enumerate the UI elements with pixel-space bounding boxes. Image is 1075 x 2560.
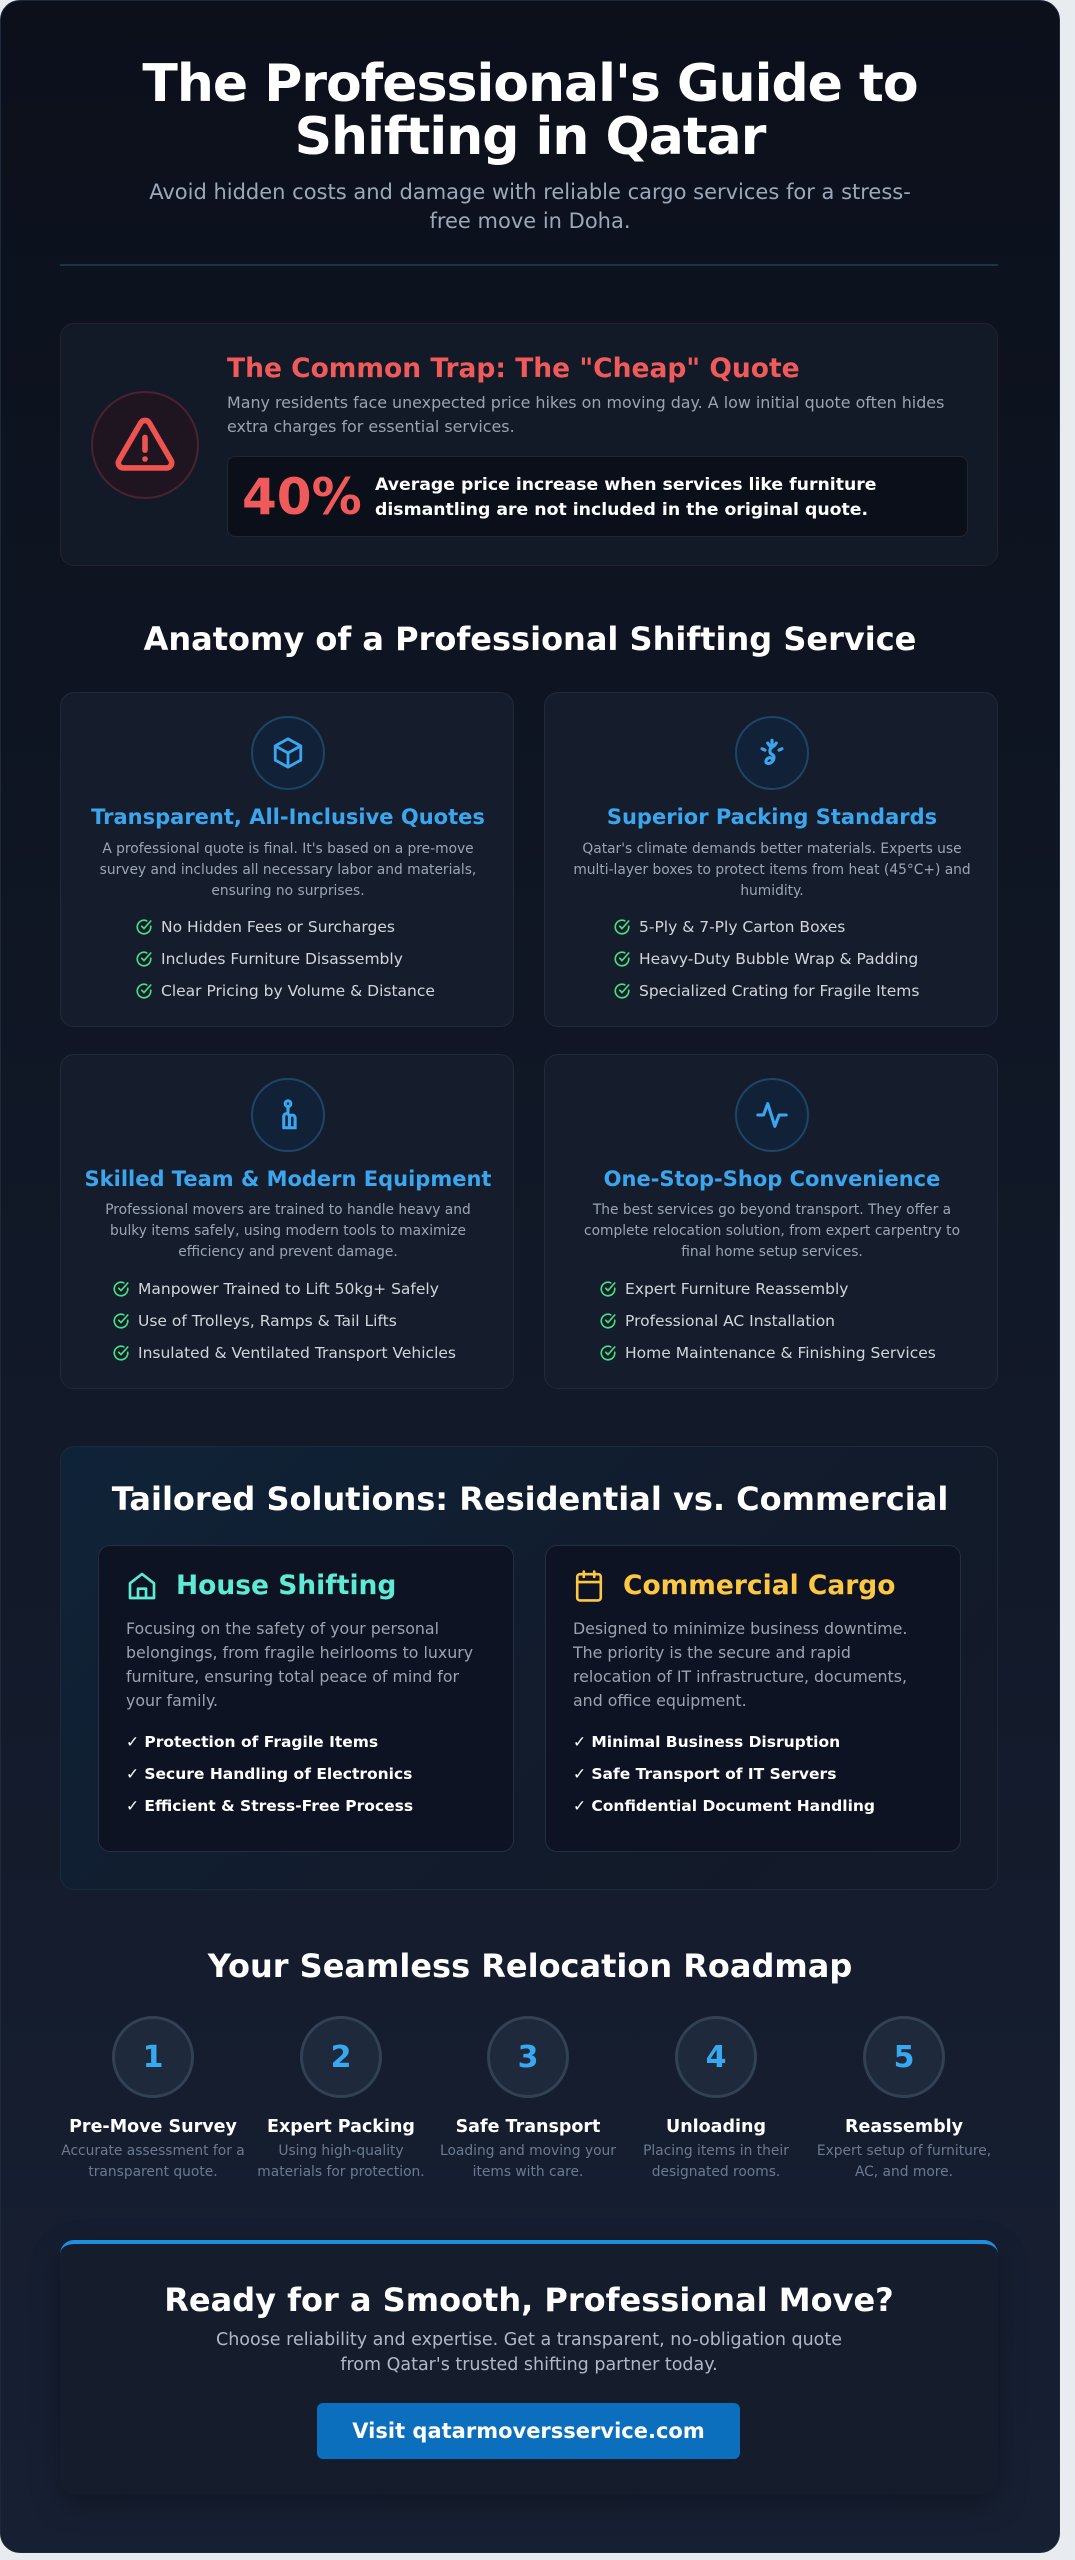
- step 1: [61, 2016, 245, 2180]
- icon: calendar: [576, 1570, 602, 1602]
- step 5: Expert setup of furniture,: [817, 2143, 991, 2159]
- card text: [573, 841, 971, 899]
- checklist: [113, 1280, 456, 1362]
- card text: [100, 841, 476, 899]
- box: house shifting: [98, 1545, 514, 1852]
- checklist: Heavy-Duty Bubble Wrap & Padding: [639, 950, 918, 968]
- card text: The best services go beyond transport. They offer a: [593, 1202, 951, 1218]
- box text: and office equipment.: [573, 1691, 747, 1710]
- checklist: Use of Trolleys, Ramps & Tail Lifts: [138, 1312, 397, 1330]
- subtitle: free move in Doha.: [429, 209, 631, 233]
- box text: furniture, ensuring total peace of mind for: [126, 1667, 459, 1686]
- box text: your family.: [126, 1691, 218, 1710]
- checklist: Clear Pricing by Volume & Distance: [161, 982, 435, 1000]
- icon: packing: [735, 716, 809, 790]
- checklist: Expert Furniture Reassembly: [625, 1280, 848, 1298]
- step 1: 1: [143, 2040, 163, 2074]
- icon: house: [128, 1572, 156, 1600]
- card text: Professional movers are trained to handle heavy and: [105, 1202, 471, 1218]
- step 2: [257, 2016, 425, 2180]
- button: [317, 2403, 740, 2459]
- trap text: extra charges for essential services.: [227, 417, 515, 436]
- subtitle: [149, 180, 911, 233]
- step 3: Safe Transport: [456, 2117, 600, 2137]
- panel: skilled team: [60, 1054, 514, 1389]
- stat text: dismantling are not included in the original quote.: [375, 500, 868, 520]
- checklist: Specialized Crating for Fragile Items: [639, 982, 919, 1000]
- bullets: [126, 1733, 413, 1815]
- step 3: items with care.: [473, 2164, 583, 2180]
- step 2: materials for protection.: [257, 2164, 425, 2180]
- title: [142, 54, 918, 167]
- stat text: Average price increase when services like furniture: [375, 475, 877, 495]
- box text: Designed to minimize business downtime.: [573, 1619, 907, 1638]
- stat: 40%: 40%: [242, 468, 362, 526]
- button: Visit qatarmoversservice.com: [352, 2419, 705, 2443]
- bullets: ✓ Minimal Business Disruption: [573, 1733, 840, 1751]
- card text: final home setup services.: [681, 1244, 863, 1260]
- stat text: [375, 475, 877, 520]
- icon: box: [251, 716, 325, 790]
- cta text: Choose reliability and expertise. Get a transparent, no-obligation quote: [216, 2330, 842, 2350]
- card text: A professional quote is final. It's based on a pre-move: [102, 841, 474, 857]
- title: Shifting in Qatar: [295, 107, 765, 167]
- step 4: [643, 2016, 789, 2180]
- card text: Qatar's climate demands better materials. Experts use: [582, 841, 962, 857]
- bullets: [573, 1733, 875, 1815]
- step 1: Accurate assessment for a: [61, 2143, 245, 2159]
- box title: House Shifting: [176, 1570, 396, 1601]
- card title: One-Stop-Shop Convenience: [604, 1167, 940, 1191]
- card text: efficiency and prevent damage.: [178, 1244, 398, 1260]
- icon: pulse: [735, 1078, 809, 1152]
- subtitle: Avoid hidden costs and damage with reliable cargo services for a stress-: [149, 180, 911, 204]
- step 4: 4: [706, 2040, 726, 2074]
- step 4: Unloading: [666, 2117, 766, 2137]
- heading: anatomy: Anatomy of a Professional Shifting Service: [144, 620, 916, 658]
- checklist: [600, 1280, 936, 1362]
- icon: worker: [251, 1078, 325, 1152]
- step 3: Loading and moving your: [440, 2143, 616, 2159]
- checklist: No Hidden Fees or Surcharges: [161, 918, 395, 936]
- step 5: [817, 2016, 991, 2180]
- icon: warning: [91, 391, 199, 499]
- box: commercial cargo: [545, 1545, 961, 1852]
- step 3: 3: [518, 2040, 538, 2074]
- card text: [584, 1202, 960, 1260]
- box text: Focusing on the safety of your personal: [126, 1619, 439, 1638]
- card text: humidity.: [740, 883, 804, 899]
- bullets: ✓ Confidential Document Handling: [573, 1797, 875, 1815]
- checklist: Professional AC Installation: [625, 1312, 835, 1330]
- checklist: 5-Ply & 7-Ply Carton Boxes: [639, 918, 845, 936]
- box text: relocation of IT infrastructure, documents,: [573, 1667, 907, 1686]
- title: The Professional's Guide to: [142, 54, 918, 114]
- step 1: Pre-Move Survey: [69, 2117, 237, 2137]
- step 3: [440, 2016, 616, 2180]
- card text: survey and includes all necessary labor and materials,: [100, 862, 476, 878]
- bullets: ✓ Secure Handling of Electronics: [126, 1765, 412, 1783]
- heading: tailored: Tailored Solutions: Residential vs. Commercial: [112, 1480, 948, 1518]
- card text: complete relocation solution, from expert carpentry to: [584, 1223, 960, 1239]
- card text: [105, 1202, 471, 1260]
- panel: common trap: [60, 323, 998, 566]
- panel: tailored solutions: [60, 1446, 998, 1890]
- box text: belongings, from fragile heirlooms to luxury: [126, 1643, 473, 1662]
- checklist: Home Maintenance & Finishing Services: [625, 1344, 936, 1362]
- panel: transparent quotes: [60, 692, 514, 1027]
- cta heading: Ready for a Smooth, Professional Move?: [164, 2281, 894, 2319]
- bullets: ✓ Safe Transport of IT Servers: [573, 1765, 836, 1783]
- heading: roadmap: Your Seamless Relocation Roadmap: [208, 1947, 852, 1985]
- step 2: Using high-quality: [278, 2143, 404, 2159]
- cta text: [216, 2330, 842, 2375]
- box text: [572, 1619, 907, 1710]
- card text: multi-layer boxes to protect items from heat (45°C+) and: [573, 862, 971, 878]
- box title: Commercial Cargo: [623, 1570, 895, 1601]
- bullets: ✓ Protection of Fragile Items: [126, 1733, 378, 1751]
- heading: trap: The Common Trap: The "Cheap" Quote: [227, 353, 800, 384]
- step 5: AC, and more.: [855, 2164, 953, 2180]
- stat box: [227, 456, 968, 537]
- checklist: [136, 918, 435, 1000]
- step 5: 5: [894, 2040, 914, 2074]
- checklist: Includes Furniture Disassembly: [161, 950, 403, 968]
- card text: bulky items safely, using modern tools to maximize: [110, 1223, 466, 1239]
- card title: Superior Packing Standards: [607, 805, 937, 829]
- checklist: Manpower Trained to Lift 50kg+ Safely: [138, 1280, 439, 1298]
- panel: one-stop-shop: [544, 1054, 998, 1389]
- card title: Skilled Team & Modern Equipment: [85, 1167, 491, 1191]
- step 4: designated rooms.: [652, 2164, 780, 2180]
- panel: call to action: [60, 2240, 998, 2494]
- step 5: Reassembly: [845, 2117, 963, 2137]
- step 2: 2: [331, 2040, 351, 2074]
- step 4: Placing items in their: [643, 2143, 789, 2159]
- cta text: from Qatar's trusted shifting partner today.: [340, 2355, 718, 2375]
- box text: The priority is the secure and rapid: [573, 1643, 851, 1662]
- step 1: transparent quote.: [88, 2164, 218, 2180]
- card text: ensuring no surprises.: [211, 883, 365, 899]
- box text: [126, 1619, 473, 1710]
- step 2: Expert Packing: [267, 2117, 415, 2137]
- trap text: [227, 393, 944, 436]
- panel: packing standards: [544, 692, 998, 1027]
- checklist: Insulated & Ventilated Transport Vehicles: [138, 1344, 456, 1362]
- checklist: [614, 918, 919, 1000]
- bullets: ✓ Efficient & Stress-Free Process: [126, 1797, 413, 1815]
- trap text: Many residents face unexpected price hikes on moving day. A low initial quote often hides: [227, 393, 944, 412]
- card title: Transparent, All-Inclusive Quotes: [91, 805, 485, 829]
